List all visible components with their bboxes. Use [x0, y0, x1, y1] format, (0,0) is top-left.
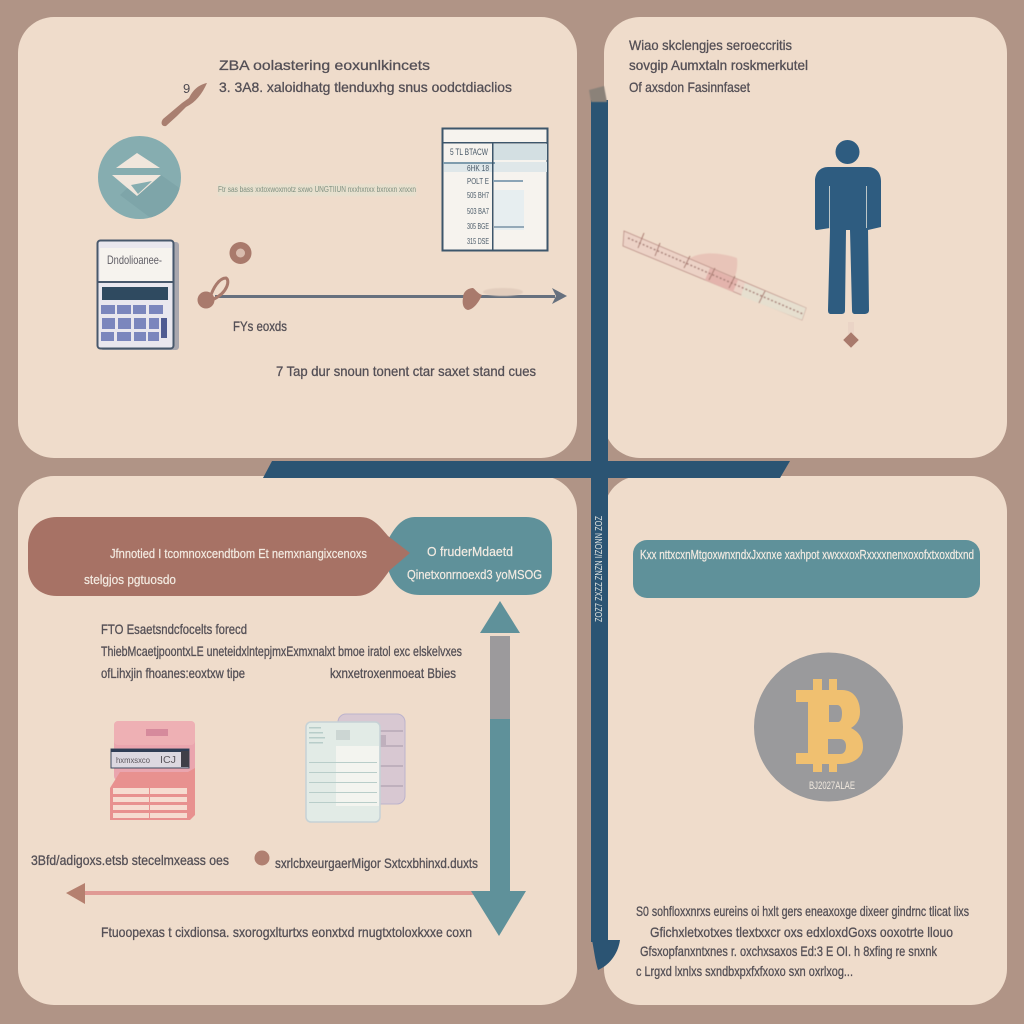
calculator keys — [101, 305, 167, 341]
callout: teal header bar — [633, 540, 980, 598]
axis: horizontal bar — [263, 461, 790, 478]
text: top left heading: 3. 3A8. xaloidhatg tlenduxhg snus oodctdiaclios — [219, 79, 512, 95]
text: top left heading — [219, 57, 512, 95]
text: top right heading: Wiao skclengjes seroeccritis — [629, 37, 792, 53]
text: top right heading — [629, 37, 808, 95]
callout: teal banner: O fruderMdaetd — [427, 544, 513, 559]
text: bottom right paragraph — [636, 903, 969, 979]
axis: vertical bar — [589, 86, 620, 970]
icon: diamond marker — [843, 322, 859, 348]
text: timeline label: FYs eoxds — [233, 318, 287, 334]
callout: brown banner: stelgjos pgtuosdo — [84, 572, 176, 587]
table card: 5 TL BTACW — [450, 147, 488, 157]
text: bottom left paragraph: FTO Esaetsndcfocelts forecd — [101, 621, 247, 637]
table card: 503 BA7 — [467, 207, 489, 216]
table card: POLT E — [467, 177, 489, 186]
faint strip label: Ftr sas bass xxtoxwoxmotz sxwo UNGTIIUN nxxhxnxx bxnxxn xnxxn — [218, 185, 416, 194]
icon: pink card stack: hxmxsxco — [116, 756, 151, 765]
table card: 6HK 18 — [467, 164, 489, 173]
table card: 305 BGE — [467, 222, 489, 231]
text: right caption: sxrlcbxeurgaerMigor Sxtcxbhinxd.duxts — [275, 855, 478, 871]
text: bottom left footer: Ftuoopexas t cixdionsa. sxorogxlturtxs eonxtxd rnugtxtoloxkxxe coxn — [101, 924, 472, 940]
icon: calculator — [98, 240, 179, 350]
table card: 505 BH7 — [467, 191, 489, 200]
icon: pink card stack: ICJ — [160, 755, 176, 766]
panel: bottom left — [18, 476, 577, 1005]
text: bottom left paragraph: ThiebMcaetjpoontxLE uneteidxlntepjmxExmxnalxt bmoe iratol exc elskelvxes — [101, 643, 462, 659]
arrow: left pointing — [66, 883, 475, 904]
callout: brown banner — [28, 517, 410, 596]
icon: person figure — [815, 140, 881, 314]
panel: bottom right — [604, 476, 1007, 1005]
text: top left footer: 7 Tap dur snoun tonent ctar saxet stand cues — [276, 363, 536, 379]
text: bottom left paragraph: ofLihxjin fhoanes:eoxtxw tipe — [101, 665, 245, 681]
text: top left heading: ZBA oolastering eoxunlkincets — [219, 57, 430, 73]
text: bottom right paragraph: Gfichxletxotxes tlextxxcr oxs edxloxdGoxs ooxotrte llouo — [650, 924, 953, 940]
icon: diagonal ruler — [623, 231, 806, 320]
text: bottom left paragraph — [101, 621, 462, 681]
text: bottom left paragraph: kxnxetroxenmoeat Bbies — [330, 665, 456, 681]
icon: brown bullet — [254, 850, 270, 866]
icon: bitcoin coin — [754, 652, 903, 802]
icon: bitcoin coin: BJ2027ALAE — [809, 780, 855, 792]
text: top right heading: Of axsdon Fasinnfaset — [629, 79, 750, 95]
callout: teal banner — [389, 517, 552, 595]
arrow: timeline — [198, 278, 567, 310]
icon: document stack — [306, 714, 405, 822]
callout: teal banner: Qinetxonrnoexd3 yoMSOG — [407, 567, 542, 582]
panel: top right — [604, 17, 1007, 458]
text: top right heading: sovgip Aumxtaln roskmerkutel — [629, 57, 808, 73]
icon: pointer stroke — [162, 81, 207, 126]
icon: pink card stack — [110, 721, 195, 820]
text: bottom right paragraph: Gfsxopfanxntxnes r. oxchxsaxos Ed:3 E OI. h 8xfing re snxnk — [640, 943, 938, 959]
table card — [442, 128, 548, 250]
text: vertical label: ZOZ7 ZXZZ ZNZN I/ZONN ZOZ — [594, 516, 605, 622]
text: left caption: 3Bfd/adigoxs.etsb stecelmxeass oes — [31, 852, 229, 868]
panel: top left — [18, 17, 577, 458]
icon: teal circle badge — [98, 136, 181, 219]
icon: target dot — [230, 242, 252, 264]
table card: 315 DSE — [467, 237, 489, 246]
text: bottom right paragraph: c Lrgxd lxnlxs sxndbxpxfxfxoxo sxn oxrlxog... — [636, 963, 853, 979]
arrow: vertical double arrow — [471, 601, 526, 936]
icon: pointer stroke: 9 — [183, 81, 190, 96]
faint strip label — [218, 184, 416, 196]
icon: calculator: Dndolioanee- — [107, 253, 162, 267]
callout: brown banner: Jfnnotied I tcomnoxcendtbom Et nemxnangixcenoxs — [110, 546, 367, 561]
